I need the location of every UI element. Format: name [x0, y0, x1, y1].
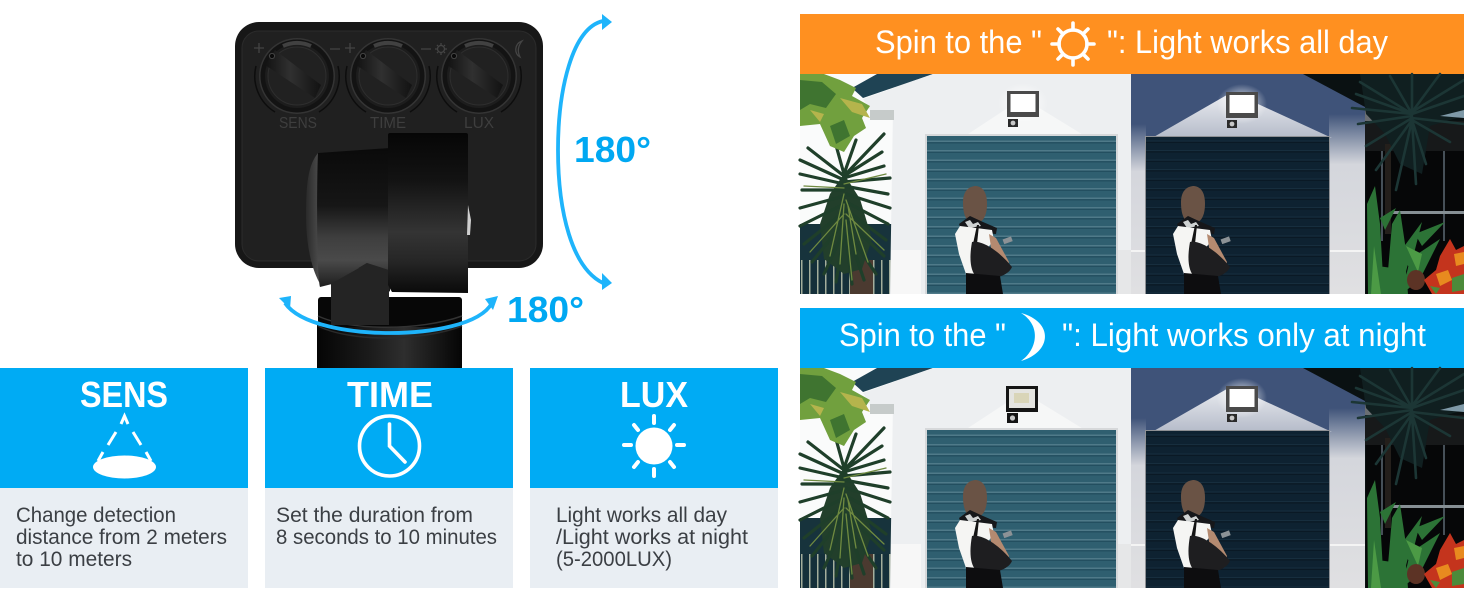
photo: garage day and night, both lights on: [800, 74, 1464, 294]
lamp off: [1006, 386, 1038, 423]
swivel bracket: [306, 133, 471, 325]
text: TIME description: 8 seconds to 10 minutes: [276, 525, 497, 549]
icon: crescent moon: [1021, 313, 1045, 361]
label: vertical 180 degrees: 180°: [574, 129, 651, 170]
text: LUX description: /Light works at night: [556, 525, 748, 549]
text: LUX description: Light works all day: [556, 503, 727, 527]
arrow: horizontal 180 degree rotation: [279, 296, 498, 333]
text: SENS description: [16, 503, 227, 571]
text: TIME description: Set the duration from: [276, 503, 473, 527]
dial labels: LUX: [464, 115, 494, 132]
text: SENS description: Change detection: [16, 503, 176, 527]
banner: night only: ": Light works only at night: [1062, 317, 1426, 353]
banner: night only: Spin to the ": [839, 317, 1006, 353]
pole: [317, 297, 462, 368]
dial labels: SENS: [279, 115, 317, 132]
panel: LUX card: [530, 368, 778, 588]
banner: all day: ": Light works all day: [1107, 24, 1388, 60]
icon: sun: [624, 416, 684, 476]
icon: detection cone: [93, 416, 156, 478]
panel: SENS card: [0, 368, 248, 588]
text: LUX description: [556, 503, 748, 571]
sensor back plate: [235, 22, 543, 268]
panel: rotating sensor product photo: [235, 22, 543, 368]
control dials: [254, 38, 522, 114]
text: SENS description: to 10 meters: [16, 547, 132, 571]
panel: night only mode: [800, 308, 1464, 588]
dial labels: [279, 115, 494, 132]
heading: SENS: SENS: [80, 374, 168, 415]
heading: LUX: LUX: [620, 374, 688, 415]
dial labels: TIME: [370, 115, 406, 132]
text: TIME description: [276, 503, 497, 549]
icon: clock: [360, 416, 420, 476]
heading: TIME: TIME: [347, 374, 433, 415]
text: LUX description: (5-2000LUX): [556, 547, 672, 571]
banner: night only: [800, 308, 1464, 368]
banner: all day: Spin to the ": [875, 24, 1042, 60]
photo: garage day with light off, night with light on: [800, 368, 1464, 588]
panel: all day mode: [800, 14, 1464, 294]
icon: sun outline: [1052, 23, 1094, 65]
panel: TIME card: [265, 368, 513, 588]
label: horizontal 180 degrees: 180°: [507, 289, 584, 330]
text: SENS description: distance from 2 meters: [16, 525, 227, 549]
banner: all day: [800, 14, 1464, 74]
arrow: vertical 180 degree rotation: [558, 14, 612, 290]
